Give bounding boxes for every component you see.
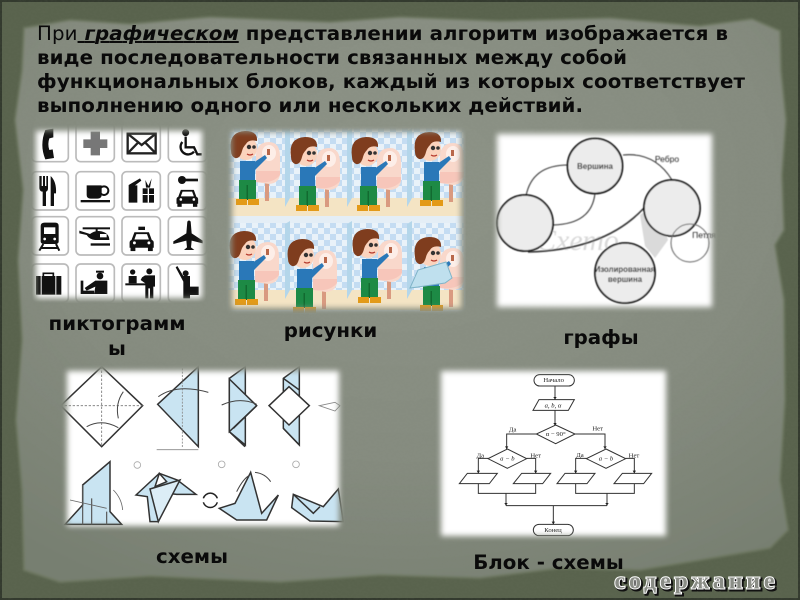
graph labels: Вершина — [577, 162, 614, 171]
icon: reception desk — [125, 268, 155, 298]
graph labels — [577, 154, 716, 284]
flowchart input block — [533, 400, 574, 410]
graph loop — [671, 224, 709, 262]
panel: graphs — [491, 128, 718, 313]
watermark: Схето — [536, 224, 619, 257]
flowchart labels: a − b — [599, 456, 614, 463]
flowchart arrowheads — [477, 397, 636, 524]
icon: telephone — [42, 129, 54, 159]
label: schemes: схемы — [156, 545, 228, 568]
icon: wheelchair — [181, 130, 202, 154]
icon: medical cross — [83, 132, 107, 155]
watermark — [539, 212, 668, 258]
flowchart process blocks — [459, 473, 652, 484]
flowchart labels: Конец — [544, 527, 562, 534]
origami step 8 — [292, 489, 343, 522]
panel: pictograms — [30, 123, 208, 303]
flowchart labels: a, b, α — [545, 402, 562, 409]
pictogram tile grid — [32, 123, 207, 302]
label: pictograms — [48, 312, 186, 360]
intro paragraph: виде последовательности связанных между собой — [37, 46, 627, 69]
graph labels: Ребро — [655, 154, 679, 164]
origami step 1 — [61, 367, 143, 447]
icon: train — [39, 223, 59, 251]
graph edges — [526, 155, 672, 252]
icon: coffee cup — [81, 185, 110, 202]
navigation link: contents: содержание — [616, 570, 776, 596]
flowchart decisions — [488, 425, 626, 468]
picture strip row 2 — [228, 221, 464, 313]
icon: helicopter — [79, 227, 110, 246]
graph labels: Изолированная — [595, 265, 655, 274]
label: flowcharts: Блок - схемы — [473, 551, 624, 574]
flowchart labels: Да — [576, 452, 584, 459]
flowchart labels: Да — [477, 453, 484, 460]
intro paragraph: выполнению одного или нескольких действий. — [37, 94, 583, 117]
origami step markers — [134, 461, 299, 468]
icon: person hailing — [176, 266, 199, 298]
graph labels: вершина — [608, 275, 643, 284]
icon: bottle and gift — [129, 178, 154, 203]
panel: flowchart — [435, 365, 672, 542]
icon: fork and knife — [39, 176, 56, 206]
flowchart connectors — [478, 386, 634, 524]
origami step 2 — [157, 367, 208, 450]
origami step 5 — [65, 462, 123, 524]
label: pictograms: пиктограмм — [48, 312, 186, 335]
origami step 3 — [222, 367, 257, 447]
panel: drawings of a boy washing hands — [226, 126, 466, 314]
origami step 6 arrows — [203, 493, 217, 507]
flowchart labels: Нет — [592, 426, 603, 433]
flowchart labels — [477, 377, 639, 534]
panel: origami schemes — [60, 365, 346, 533]
origami step 4 — [269, 367, 340, 445]
label: pictograms: ы — [108, 337, 126, 360]
flowchart terminators — [533, 375, 574, 536]
navigation link: contents: содержание — [614, 568, 775, 594]
flowchart labels: a − b — [500, 456, 515, 463]
icon: customs officer — [81, 271, 107, 294]
label: drawings: рисунки — [284, 319, 377, 342]
flowchart labels: Начало — [543, 377, 565, 384]
picture strip row 1 — [228, 128, 464, 216]
icon: envelope — [128, 134, 156, 153]
flowchart labels: Да — [509, 426, 516, 433]
icon: suitcase — [36, 273, 61, 295]
intro paragraph: При графическом представлении алгоритм изображается в — [37, 22, 728, 45]
origami step 7 — [219, 472, 278, 520]
origami step 6 — [136, 473, 196, 522]
intro paragraph — [37, 22, 746, 117]
icon: taxi — [130, 227, 154, 251]
flowchart labels: Нет — [629, 453, 639, 460]
label: graphs: графы — [563, 326, 639, 349]
flowchart labels: α − 90° — [546, 431, 566, 438]
icon: airplane — [173, 220, 203, 250]
graph vertices — [497, 138, 700, 303]
icon: key and car — [176, 176, 198, 207]
intro paragraph: функциональных блоков, каждый из которых соответствует — [37, 70, 746, 93]
flowchart labels: Нет — [530, 453, 541, 460]
graph labels: Петля — [692, 230, 716, 240]
